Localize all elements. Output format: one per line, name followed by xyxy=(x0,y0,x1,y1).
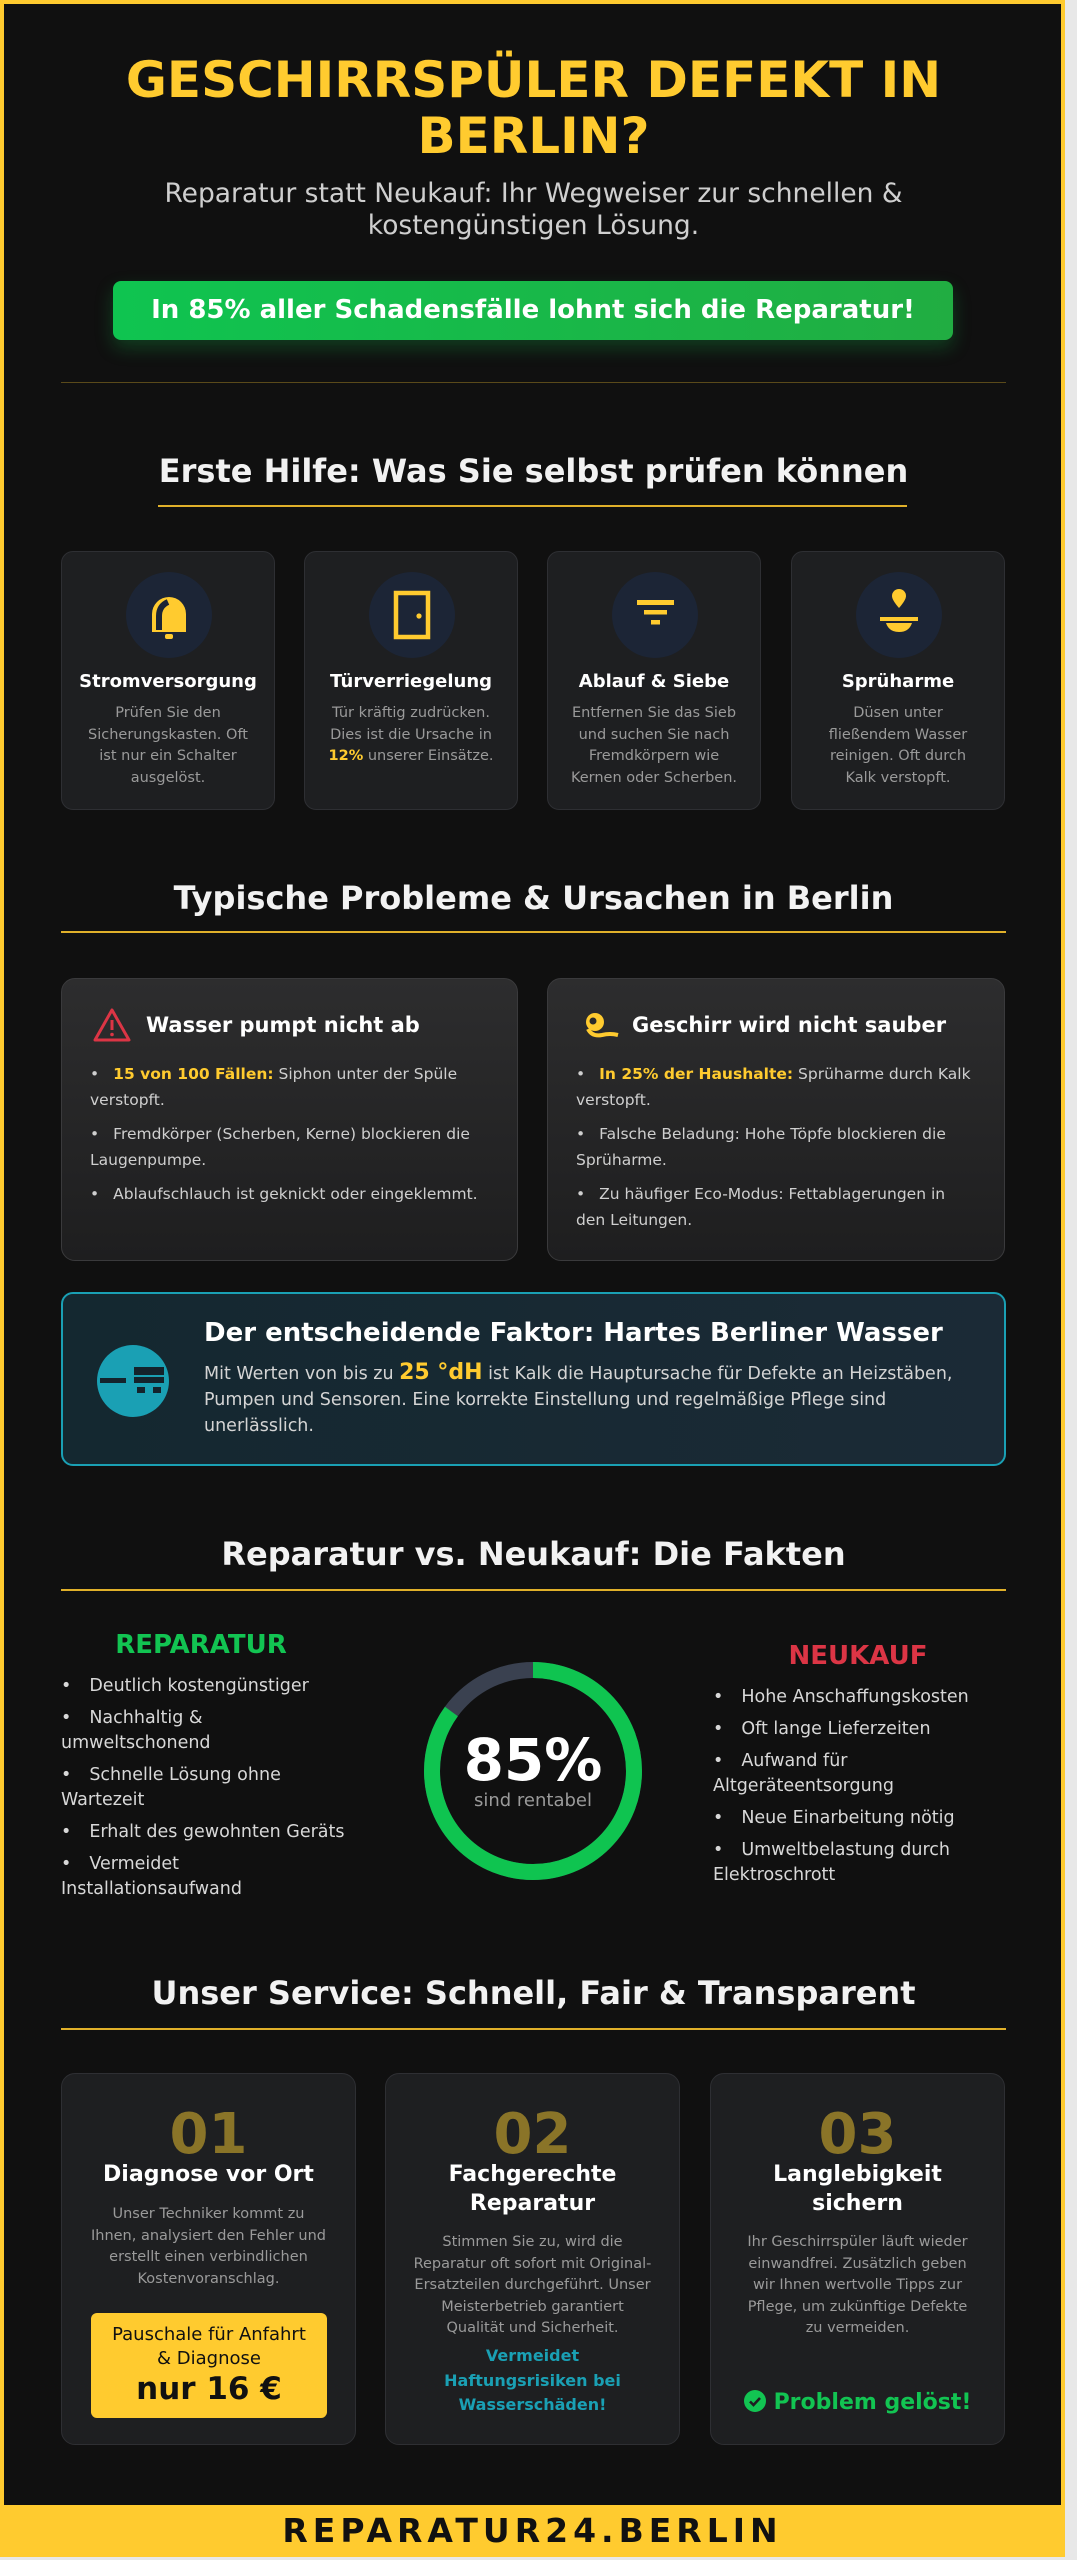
column: Neukauf: Aufwand für Altgeräteentsorgung xyxy=(713,1751,894,1796)
banner: 85% repair xyxy=(113,281,953,340)
callout: hartes Berliner Wasser: Mit Werten von bis zu 25 °dH ist Kalk die Hauptursache für Defekte an Heizstäben, Pumpen und Sensoren. Eine korrekte Einstellung und regelmäßige Pflege sind unerlässlich. xyxy=(204,1360,952,1436)
column: Neukauf: Neue Einarbeitung nötig xyxy=(741,1808,955,1828)
price box: nur 16 € xyxy=(136,2371,282,2407)
panel: Geschirr wird nicht sauber: Zu häufiger Eco-Modus: Fettablagerungen in den Leitungen. xyxy=(576,1185,945,1229)
icon: dish sponge xyxy=(586,1013,618,1038)
heading: Erste Hilfe: Erste Hilfe: Was Sie selbst prüfen können xyxy=(159,452,908,490)
footer xyxy=(0,2505,1065,2557)
card: Sprüharme: Sprüharme xyxy=(842,671,954,692)
column: Reparatur: Schnelle Lösung ohne Wartezeit xyxy=(61,1765,281,1810)
heading: Unser Service: Unser Service: Schnell, Fair & Transparent xyxy=(151,1974,916,2012)
column: Reparatur: Nachhaltig & umweltschonend xyxy=(61,1708,211,1753)
card: Türverriegelung xyxy=(304,551,518,810)
card: 01 Diagnose xyxy=(61,2073,356,2445)
panel: Geschirr wird nicht sauber: Falsche Beladung: Hohe Töpfe blockieren die Sprüharme. xyxy=(576,1125,946,1169)
column: Reparatur: Deutlich kostengünstiger xyxy=(89,1676,309,1696)
column: Reparatur xyxy=(61,1630,345,1899)
heading: Typische Probleme: Typische Probleme & Ursachen in Berlin xyxy=(174,879,893,917)
card: Sprüharme xyxy=(791,551,1005,810)
card: 02 Reparatur: 02 xyxy=(494,2102,571,2167)
card: 03 Langlebigkeit xyxy=(710,2073,1005,2445)
card: 03 Langlebigkeit: 03 xyxy=(819,2102,896,2167)
card: 01 Diagnose: Unser Techniker kommt zu Ihnen, analysiert den Fehler und erstellt einen verbindlichen Kostenvoranschlag. xyxy=(91,2206,326,2286)
card: Türverriegelung: Tür kräftig zudrücken. Dies ist die Ursache in 12% unserer Einsätze. xyxy=(329,705,493,764)
footer: REPARATUR24.BERLIN xyxy=(282,2511,783,2550)
panel: Wasser pumpt nicht ab: Fremdkörper (Scherben, Kerne) blockieren die Laugenpumpe. xyxy=(90,1125,470,1169)
subtitle: Reparatur statt Neukauf: Ihr Wegweiser zur schnellen & kostengünstigen Lösung. xyxy=(164,178,903,241)
heading: Reparatur vs. Neukauf: Reparatur vs. Neukauf: Die Fakten xyxy=(221,1535,846,1573)
icon: door xyxy=(369,572,455,658)
icon: water tap xyxy=(97,1345,169,1417)
column: Neukauf: Hohe Anschaffungskosten xyxy=(741,1687,969,1707)
card: 03 Langlebigkeit: Ihr Geschirrspüler läuft wieder einwandfrei. Zusätzlich geben wir Ihnen wertvolle Tipps zur Pflege, um zukünftige Defekte zu vermeiden. xyxy=(747,2234,968,2336)
icon: warning xyxy=(94,1008,131,1042)
column: Reparatur: REPARATUR xyxy=(115,1630,287,1660)
card: Ablauf & Siebe: Entfernen Sie das Sieb und suchen Sie nach Fremdkörpern wie Kernen oder Scherben. xyxy=(571,705,737,786)
card: 01 Diagnose: Diagnose vor Ort xyxy=(103,2162,314,2187)
card: 03 Langlebigkeit: Langlebigkeit xyxy=(773,2162,942,2187)
card: 02 Reparatur: Reparatur xyxy=(470,2191,595,2216)
panel: Geschirr wird nicht sauber: Geschirr wird nicht sauber xyxy=(632,1013,946,1037)
title: GESCHIRRSPÜLER DEFEKT IN BERLIN? xyxy=(126,51,941,165)
panel: Wasser pumpt nicht ab: Wasser pumpt nicht ab xyxy=(146,1013,420,1037)
card: Sprüharme: Düsen unter fließendem Wasser reinigen. Oft durch Kalk verstopft. xyxy=(829,705,967,786)
panel: Wasser pumpt nicht ab: Ablaufschlauch ist geknickt oder eingeklemmt. xyxy=(113,1185,478,1203)
price box xyxy=(91,2313,327,2418)
icon: filter xyxy=(612,572,698,658)
chart: donut 85%: 85% xyxy=(464,1726,602,1794)
column: Reparatur: Vermeidet Installationsaufwand xyxy=(61,1854,242,1899)
column: Neukauf: NEUKAUF xyxy=(788,1641,927,1671)
card: Stromversorgung xyxy=(61,551,275,810)
card: Türverriegelung: Türverriegelung xyxy=(330,671,492,692)
banner: 85% repair: In 85% aller Schadensfälle lohnt sich die Reparatur! xyxy=(151,295,915,325)
panel: Wasser pumpt nicht ab: 15 von 100 Fällen: Siphon unter der Spüle verstopft. xyxy=(90,1065,457,1109)
column: Reparatur: Erhalt des gewohnten Geräts xyxy=(89,1822,345,1842)
card: 02 Reparatur xyxy=(385,2073,680,2445)
card: Ablauf & Siebe: Ablauf & Siebe xyxy=(579,671,729,692)
column: Neukauf: Oft lange Lieferzeiten xyxy=(741,1719,931,1739)
callout: hartes Berliner Wasser xyxy=(61,1292,1006,1466)
panel: Wasser pumpt nicht ab xyxy=(61,978,518,1261)
chart: donut 85%: sind rentabel xyxy=(474,1790,592,1811)
card: Ablauf & Siebe xyxy=(547,551,761,810)
card: Stromversorgung: Stromversorgung xyxy=(79,671,257,692)
card: Stromversorgung: Prüfen Sie den Sicherungskasten. Oft ist nur ein Schalter ausgelöst. xyxy=(88,705,248,786)
card: 01 Diagnose: 01 xyxy=(170,2102,247,2167)
card: 02 Reparatur: Vermeidet Haftungsrisiken bei Wasserschäden! xyxy=(444,2346,621,2414)
panel: Geschirr wird nicht sauber xyxy=(547,978,1005,1261)
panel: Geschirr wird nicht sauber: In 25% der Haushalte: Sprüharme durch Kalk verstopft. xyxy=(576,1065,971,1109)
card: 03 Langlebigkeit: sichern xyxy=(812,2191,903,2216)
icon: bell xyxy=(126,572,212,658)
callout: hartes Berliner Wasser: Der entscheidende Faktor: Hartes Berliner Wasser xyxy=(204,1318,943,1348)
badge: Problem gelöst: Problem gelöst! xyxy=(774,2390,971,2415)
price box: Pauschale für Anfahrt & Diagnose xyxy=(112,2324,306,2369)
icon: spray xyxy=(856,572,942,658)
card: 02 Reparatur: Fachgerechte xyxy=(449,2162,616,2187)
card: 02 Reparatur: Stimmen Sie zu, wird die Reparatur oft sofort mit Original-Ersatzteilen durchgeführt. Unser Meisterbetrieb garantiert Qualität und Sicherheit. xyxy=(414,2234,651,2336)
column: Neukauf xyxy=(713,1641,969,1885)
chart: donut 85% xyxy=(424,1662,642,1880)
column: Neukauf: Umweltbelastung durch Elektroschrott xyxy=(713,1840,950,1885)
